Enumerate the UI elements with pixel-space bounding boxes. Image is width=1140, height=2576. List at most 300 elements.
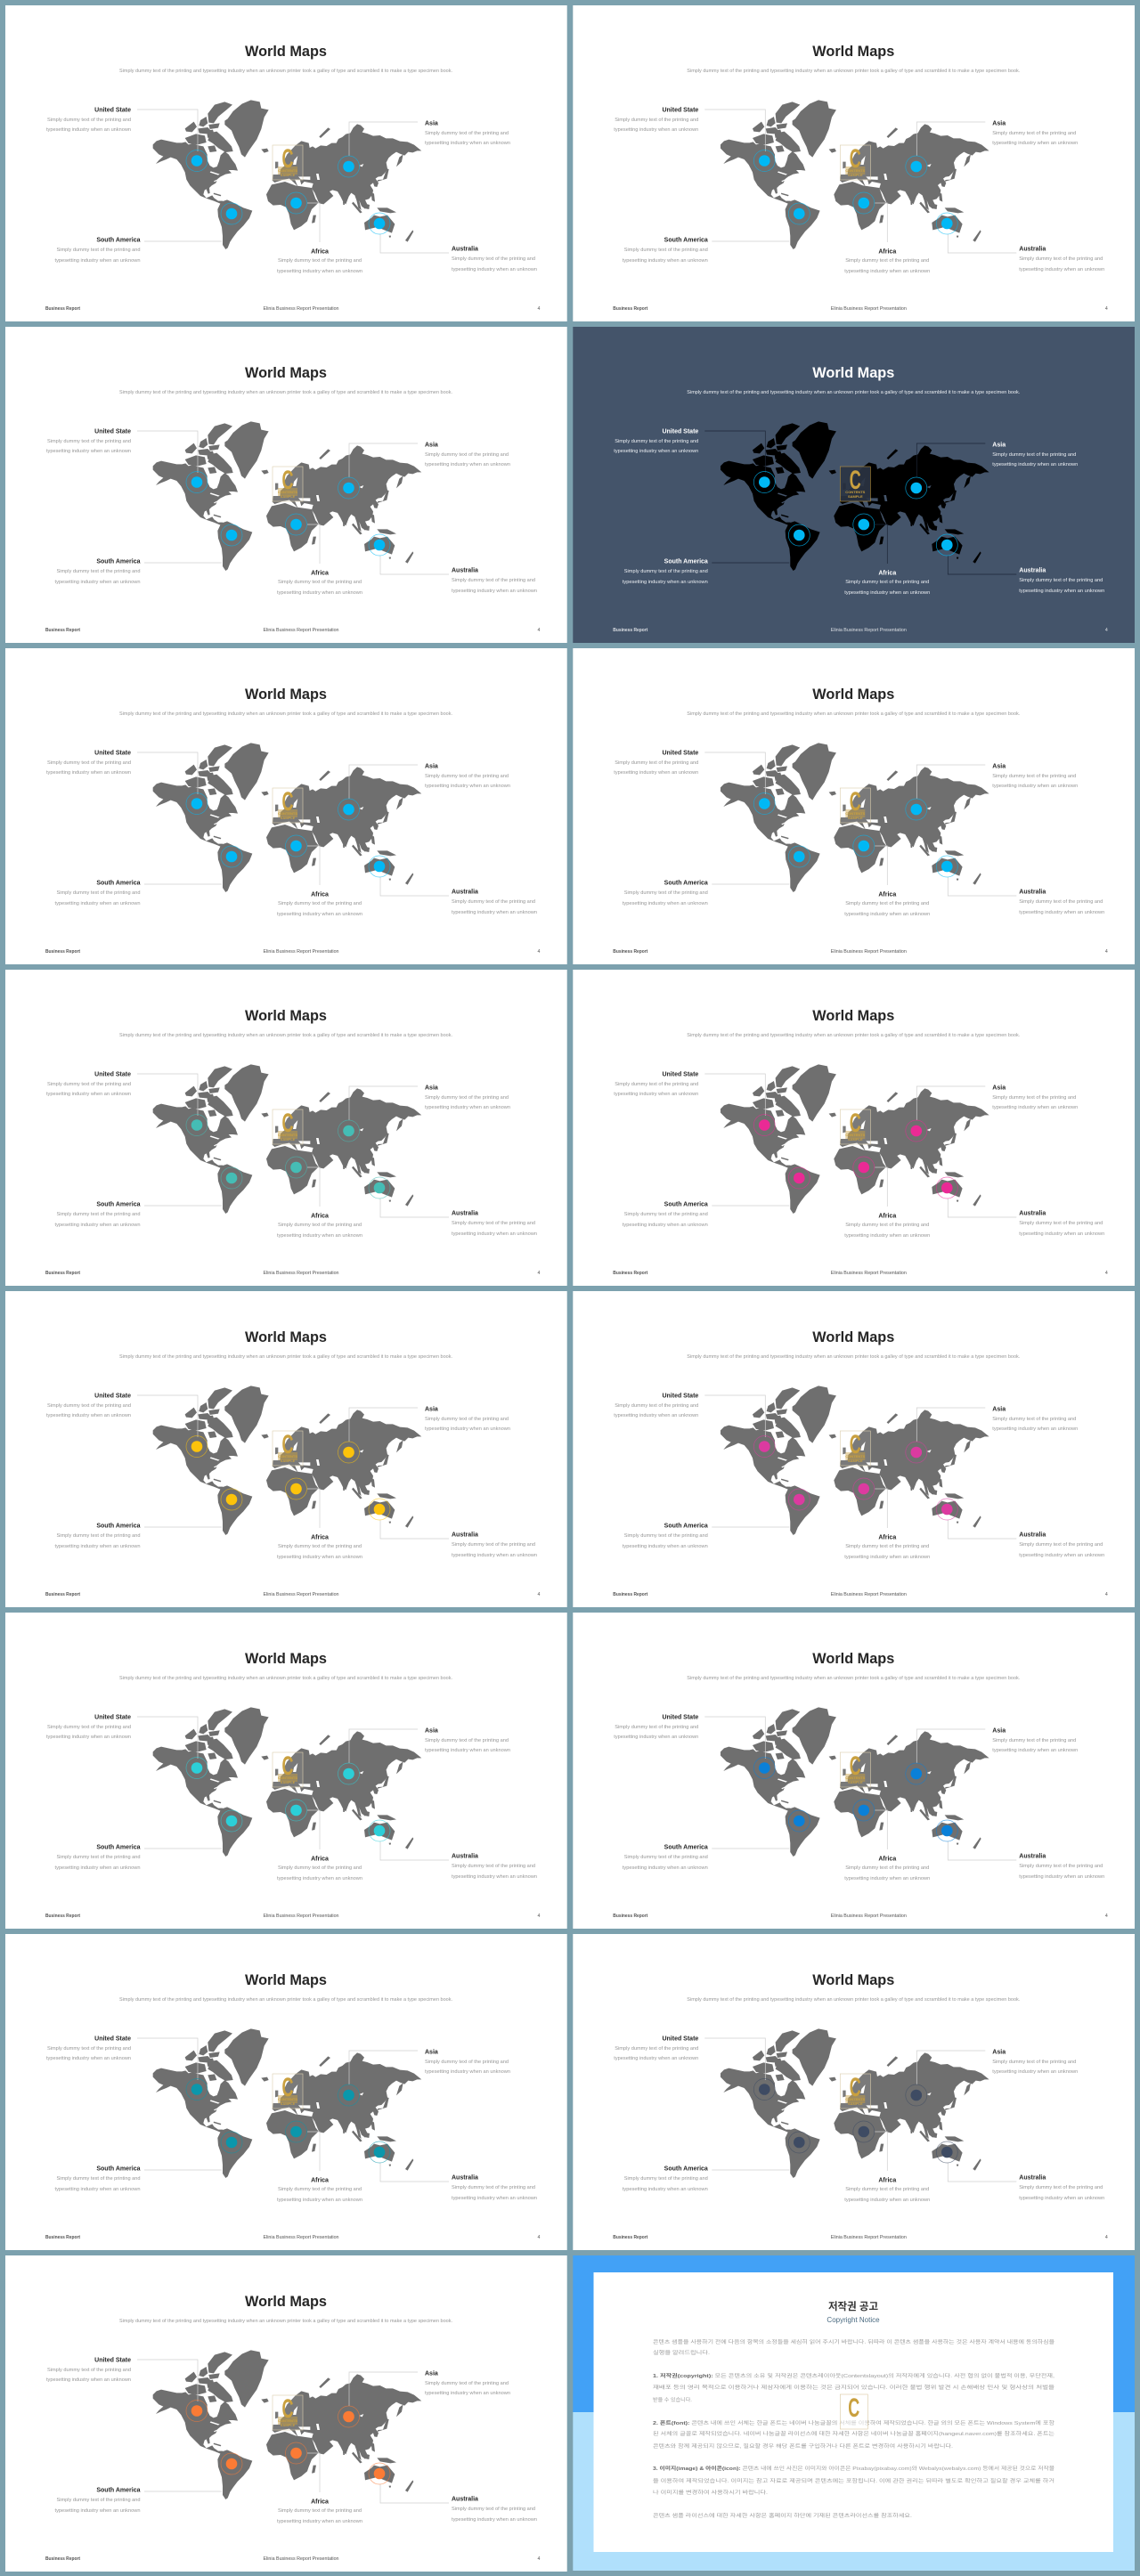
label: South America: typesetting industry when an unknown <box>55 580 141 585</box>
label: Asia: typesetting industry when an unknown <box>992 141 1078 146</box>
location markers <box>186 2401 390 2484</box>
footer <box>45 628 541 633</box>
label: Asia: typesetting industry when an unknown <box>425 1105 510 1110</box>
label: Asia <box>425 1407 510 1432</box>
label: South America: South America <box>96 1845 141 1850</box>
label: United State <box>614 429 698 454</box>
leader lines <box>704 110 1016 253</box>
footer <box>45 949 541 955</box>
location markers <box>753 792 957 877</box>
label: South America <box>623 880 708 906</box>
watermark: CONTENTS <box>845 811 866 816</box>
label: Asia: typesetting industry when an unknown <box>425 141 510 146</box>
watermark: CONTENTS <box>278 490 297 494</box>
watermark: SAMPLE <box>848 494 863 499</box>
label: United State: Simply dummy text of the printing and <box>47 2368 131 2373</box>
label: United State: Simply dummy text of the printing and <box>47 439 131 444</box>
label: South America <box>55 237 141 264</box>
label: United State: typesetting industry when an unknown <box>614 127 698 133</box>
notice body text: 된 서체의 글꼴로 제작되었습니다. 네이버 나눔글꼴 라이선스에 대한 자세한 사항은 네이버 나눔글꼴 홈페이지(hangeul.naver.com)를 참조하세요. 폰트는 <box>653 2430 1055 2437</box>
leader lines <box>137 431 449 574</box>
footer: 4 <box>538 628 541 633</box>
label: Africa: typesetting industry when an unknown <box>844 590 930 596</box>
watermark: SAMPLE <box>848 816 863 820</box>
label: South America: typesetting industry when an unknown <box>623 1544 708 1549</box>
label: Africa: typesetting industry when an unknown <box>844 2198 930 2203</box>
footer <box>613 2235 1108 2240</box>
label: United State <box>46 750 131 776</box>
label: South America: typesetting industry when an unknown <box>55 2508 141 2514</box>
footer: 4 <box>538 949 541 955</box>
footer: Elinia Business Report Presentation <box>264 1271 339 1276</box>
location markers <box>186 472 390 556</box>
world map <box>153 1707 421 1857</box>
label: Africa <box>277 1213 362 1239</box>
label: South America: typesetting industry when an unknown <box>55 2187 141 2192</box>
leader lines <box>137 110 449 253</box>
label: United State: United State <box>662 2036 698 2043</box>
location markers <box>753 150 957 234</box>
notice body text: 받을 수 있습니다. <box>653 2396 692 2403</box>
slide 9: world map, yellow markers <box>5 1291 567 1607</box>
slide 14: world map, navy markers <box>573 1934 1135 2250</box>
label: Africa: Africa <box>311 892 329 898</box>
watermark: SAMPLE <box>281 816 296 820</box>
label: Africa <box>277 1535 362 1560</box>
label: United State <box>614 2036 698 2061</box>
title: World Maps <box>812 1007 894 1024</box>
label: Asia <box>425 764 510 789</box>
watermark: CONTENTS <box>845 490 866 494</box>
label: Australia: Australia <box>452 246 478 253</box>
notice body text: 나 이미지를 변경하여 사용하시기 바랍니다. <box>653 2489 768 2496</box>
watermark: SAMPLE <box>281 1137 296 1142</box>
watermark: C <box>850 466 861 495</box>
label: South America: South America <box>96 2166 141 2173</box>
label: South America <box>623 237 708 264</box>
slide 1: world map, blue markers <box>5 5 567 321</box>
label: Australia <box>452 1854 537 1880</box>
footer <box>613 1592 1108 1597</box>
label: Africa: typesetting industry when an unknown <box>277 2198 362 2203</box>
footer: Business Report <box>45 628 80 633</box>
notice body text: 콘텐츠 샘플 라이선스에 대한 자세한 사항은 홈페이지 하단에 기재된 콘텐츠라이선스를 참조하세요. <box>653 2512 912 2519</box>
label: Africa: typesetting industry when an unknown <box>277 2519 362 2524</box>
label: Africa: Simply dummy text of the printing and <box>845 2187 929 2192</box>
footer: 4 <box>1105 628 1108 633</box>
world map <box>721 100 989 249</box>
label: Asia: Asia <box>425 764 438 769</box>
footer: Elinia Business Report Presentation <box>831 1271 907 1276</box>
watermark: C <box>281 2073 294 2102</box>
location markers <box>753 1435 957 1520</box>
label: South America: typesetting industry when an unknown <box>55 258 141 264</box>
label: Australia: Simply dummy text of the printing and <box>1019 2185 1103 2190</box>
label: Africa <box>277 570 362 596</box>
slide 10: world map, magenta markers <box>573 1291 1135 1607</box>
label: Australia <box>452 1532 537 1558</box>
footer <box>45 1914 541 1919</box>
subtitle: Simply dummy text of the printing and typesetting industry when an unknown printer took a galley of type and scrambled it to make a type specimen book. <box>687 1676 1020 1681</box>
slide 13: world map, dark teal markers <box>5 1934 567 2250</box>
label: United State: typesetting industry when an unknown <box>614 1735 698 1740</box>
leader lines <box>137 752 449 896</box>
label: Asia <box>992 1407 1078 1432</box>
label: South America <box>623 2166 708 2192</box>
label: Australia: Simply dummy text of the printing and <box>1019 1221 1103 1226</box>
location markers <box>753 1115 957 1199</box>
label: United State <box>46 429 131 454</box>
watermark: SAMPLE <box>848 173 863 177</box>
world map <box>153 1064 421 1214</box>
subheading: Copyright Notice <box>826 2316 880 2324</box>
location markers <box>753 1758 957 1841</box>
label: South America: South America <box>96 559 141 565</box>
label: Australia: typesetting industry when an unknown <box>452 267 537 272</box>
label: Africa <box>844 1535 930 1560</box>
label: United State: typesetting industry when an unknown <box>46 1413 131 1418</box>
footer: 4 <box>1105 1914 1108 1919</box>
label: Africa <box>277 892 362 917</box>
label: Australia: Australia <box>1019 2174 1046 2182</box>
watermark <box>273 1109 303 1144</box>
label: Asia: typesetting industry when an unknown <box>425 1426 510 1432</box>
label: Africa: Africa <box>311 249 329 255</box>
label: Africa <box>277 249 362 274</box>
title: World Maps <box>245 1007 327 1024</box>
watermark: C <box>281 1109 294 1138</box>
footer: 4 <box>1105 1592 1108 1597</box>
label: Africa: Simply dummy text of the printing and <box>278 1544 362 1549</box>
label: Africa <box>844 249 930 274</box>
label: South America: South America <box>664 1523 708 1530</box>
world map <box>721 743 989 892</box>
label: Australia: typesetting industry when an unknown <box>452 1231 537 1237</box>
title: World Maps <box>245 43 327 60</box>
label: Asia: typesetting industry when an unknown <box>992 462 1078 467</box>
watermark: C <box>850 1109 861 1138</box>
footer <box>45 1271 541 1276</box>
footer: Elinia Business Report Presentation <box>264 628 339 633</box>
label: Asia: Simply dummy text of the printing and <box>992 1738 1076 1743</box>
label: Australia: Australia <box>452 889 478 896</box>
watermark: CONTENTS <box>278 1133 297 1137</box>
label: Asia <box>992 121 1078 146</box>
watermark: C <box>848 2393 859 2423</box>
label: United State <box>614 1715 698 1740</box>
watermark: SAMPLE <box>848 1137 863 1142</box>
watermark: C <box>281 787 294 817</box>
label: United State: typesetting industry when an unknown <box>46 127 131 133</box>
watermark: CONTENTS <box>845 1776 866 1780</box>
label: Australia: Australia <box>1019 568 1046 573</box>
watermark <box>840 787 870 823</box>
footer: Elinia Business Report Presentation <box>831 2235 907 2240</box>
watermark <box>273 787 303 823</box>
leader lines <box>137 2360 449 2503</box>
label: Australia: typesetting industry when an unknown <box>452 910 537 915</box>
watermark: CONTENTS <box>278 811 297 816</box>
label: United State <box>46 107 131 133</box>
label: Australia: Simply dummy text of the printing and <box>452 2507 535 2512</box>
label: South America: Simply dummy text of the printing and <box>624 569 708 574</box>
label: South America: Simply dummy text of the printing and <box>624 1855 708 1860</box>
label: United State: United State <box>662 750 698 757</box>
footer <box>45 2235 541 2240</box>
label: Australia: typesetting industry when an unknown <box>452 1553 537 1558</box>
subtitle: Simply dummy text of the printing and typesetting industry when an unknown printer took a galley of type and scrambled it to make a type specimen book. <box>119 390 452 395</box>
label: Asia <box>992 1085 1078 1110</box>
watermark: CONTENTS <box>278 2418 297 2423</box>
label: Australia: Simply dummy text of the printing and <box>452 1864 535 1869</box>
location markers <box>186 1758 390 1841</box>
label: South America: South America <box>664 1202 708 1207</box>
label: Asia: Simply dummy text of the printing and <box>425 1417 509 1422</box>
label: South America: Simply dummy text of the printing and <box>57 2176 141 2182</box>
label: South America: Simply dummy text of the printing and <box>57 2498 141 2503</box>
label: Africa: typesetting industry when an unknown <box>844 912 930 917</box>
label: Africa: typesetting industry when an unknown <box>844 269 930 274</box>
location markers <box>186 150 390 234</box>
label: Australia: Simply dummy text of the printing and <box>452 578 535 583</box>
label: Africa: typesetting industry when an unknown <box>277 1233 362 1239</box>
title: World Maps <box>245 2293 327 2310</box>
location markers <box>186 2078 390 2163</box>
leader lines <box>137 1717 449 1860</box>
label: Australia: Australia <box>452 568 478 573</box>
footer: Business Report <box>45 2556 80 2562</box>
footer: Elinia Business Report Presentation <box>831 628 907 633</box>
label: Asia: typesetting industry when an unknown <box>425 2391 510 2396</box>
label: Australia: typesetting industry when an unknown <box>1019 267 1104 272</box>
label: Australia: Australia <box>452 1211 478 1216</box>
world map <box>721 1064 989 1214</box>
label: Africa <box>844 2178 930 2203</box>
watermark: CONTENTS <box>845 168 866 173</box>
label: South America: typesetting industry when an unknown <box>55 1223 141 1228</box>
slide 16: copyright notice <box>573 2255 1135 2571</box>
label: Australia: Australia <box>1019 1211 1046 1216</box>
label: South America: typesetting industry when an unknown <box>623 901 708 906</box>
label: United State: United State <box>94 1393 131 1400</box>
label: Asia: Asia <box>992 764 1006 769</box>
label: Asia <box>425 2370 510 2396</box>
watermark: C <box>281 1430 294 1459</box>
world map <box>153 2028 421 2178</box>
watermark: SAMPLE <box>848 2101 863 2106</box>
title: World Maps <box>812 686 894 703</box>
label: South America: Simply dummy text of the printing and <box>57 890 141 896</box>
leader lines <box>137 1074 449 1217</box>
label: Australia <box>452 1211 537 1237</box>
label: Australia: typesetting industry when an unknown <box>1019 2196 1104 2201</box>
label: South America: Simply dummy text of the printing and <box>57 248 141 253</box>
label: Asia: typesetting industry when an unknown <box>425 462 510 467</box>
label: Africa: typesetting industry when an unknown <box>277 269 362 274</box>
label: Asia: Simply dummy text of the printing and <box>992 774 1076 779</box>
footer: Elinia Business Report Presentation <box>264 2235 339 2240</box>
label: Africa <box>844 1856 930 1881</box>
footer <box>45 1592 541 1597</box>
footer: Elinia Business Report Presentation <box>264 949 339 955</box>
label: South America: South America <box>96 880 141 887</box>
label: Asia <box>425 2050 510 2075</box>
subtitle: Simply dummy text of the printing and typesetting industry when an unknown printer took a galley of type and scrambled it to make a type specimen book. <box>687 390 1020 395</box>
label: Australia <box>1019 1532 1104 1558</box>
watermark: C <box>850 144 861 174</box>
footer <box>613 1271 1108 1276</box>
label: Asia <box>425 442 510 467</box>
label: United State: Simply dummy text of the printing and <box>615 2046 698 2052</box>
label: Asia: typesetting industry when an unknown <box>992 1748 1078 1753</box>
label: United State: typesetting industry when an unknown <box>614 1413 698 1418</box>
watermark: C <box>281 1751 294 1781</box>
world map <box>721 1707 989 1857</box>
panel: notice card <box>593 2272 1113 2552</box>
label: Asia: Asia <box>992 1407 1006 1412</box>
label: Asia <box>425 1727 510 1753</box>
label: Africa: typesetting industry when an unknown <box>844 1876 930 1881</box>
notice body text: 3. 이미지(image) & 아이콘(icon): 콘텐츠 내에 쓰인 사진은 이미지와 아이콘은 Pixabay(pixabay.com)와 Webalys(webalys.com) 등에서 제공된 것으로 저작물 <box>653 2465 1055 2472</box>
label: United State: Simply dummy text of the printing and <box>47 2046 131 2052</box>
label: United State: typesetting industry when an unknown <box>614 770 698 776</box>
label: South America: South America <box>664 2166 708 2173</box>
label: Australia: typesetting industry when an unknown <box>1019 1231 1104 1237</box>
label: South America: Simply dummy text of the printing and <box>57 1533 141 1539</box>
footer: Elinia Business Report Presentation <box>831 1914 907 1919</box>
label: South America: typesetting industry when an unknown <box>55 1865 141 1871</box>
watermark: SAMPLE <box>848 1780 863 1784</box>
label: South America: typesetting industry when an unknown <box>623 580 708 585</box>
label: Africa: typesetting industry when an unknown <box>277 912 362 917</box>
title: World Maps <box>245 1329 327 1345</box>
leader lines <box>704 1074 1016 1217</box>
watermark: SAMPLE <box>281 1780 296 1784</box>
label: South America <box>55 1845 141 1871</box>
label: South America: typesetting industry when an unknown <box>55 901 141 906</box>
footer: Business Report <box>45 1914 80 1919</box>
label: United State: Simply dummy text of the printing and <box>615 1403 698 1409</box>
label: Africa <box>844 570 930 596</box>
label: Asia: Simply dummy text of the printing and <box>992 1095 1076 1101</box>
label: South America: South America <box>664 237 708 244</box>
label: Australia: Australia <box>1019 1854 1046 1859</box>
label: United State: Simply dummy text of the printing and <box>615 439 698 444</box>
label: Africa: Africa <box>878 2178 896 2183</box>
label: South America: Simply dummy text of the printing and <box>624 2176 708 2182</box>
notice body text: 2. 폰트(font): 콘텐츠 내에 쓰인 서체는 한글 폰트는 네이버 나눔글꼴의 서체를 이용하여 제작되었습니다. 한글 외의 모든 폰트는 Windows System에 포함 <box>653 2419 1055 2426</box>
watermark: C <box>850 1430 861 1459</box>
label: Australia: typesetting industry when an unknown <box>1019 1553 1104 1558</box>
label: Australia: Simply dummy text of the printing and <box>452 256 535 262</box>
label: United State: United State <box>662 1393 698 1400</box>
slide 2: world map, blue markers <box>573 5 1135 321</box>
label: Australia: typesetting industry when an unknown <box>1019 910 1104 915</box>
label: United State <box>46 2036 131 2061</box>
label: Asia: Asia <box>425 121 438 126</box>
label: United State: United State <box>94 429 131 435</box>
footer: Business Report <box>613 306 648 312</box>
label: Asia: Asia <box>992 1085 1006 1092</box>
label: Asia <box>425 1085 510 1110</box>
label: Africa: Africa <box>878 1535 896 1540</box>
label: South America: Simply dummy text of the printing and <box>624 1212 708 1217</box>
label: Asia <box>992 2050 1078 2075</box>
world map <box>153 421 421 571</box>
notice body text: 콘텐츠와 함께 제공되지 않으므로, 필요할 경우 해당 폰트를 구입하거나 다른 폰트로 변경하여 사용하시기 바랍니다. <box>653 2442 953 2450</box>
footer: Elinia Business Report Presentation <box>831 1592 907 1597</box>
label: Australia <box>1019 1854 1104 1880</box>
subtitle: Simply dummy text of the printing and typesetting industry when an unknown printer took a galley of type and scrambled it to make a type specimen book. <box>119 69 452 74</box>
label: South America: typesetting industry when an unknown <box>623 1223 708 1228</box>
label: Africa: Africa <box>878 570 896 577</box>
label: Australia: Simply dummy text of the printing and <box>452 1542 535 1548</box>
label: United State: United State <box>94 2036 131 2043</box>
label: Australia: typesetting industry when an unknown <box>1019 589 1104 594</box>
label: Asia: Asia <box>992 1727 1006 1735</box>
label: United State: United State <box>662 107 698 114</box>
label: Australia <box>1019 889 1104 915</box>
label: Asia: Simply dummy text of the printing and <box>425 774 509 779</box>
label: United State: Simply dummy text of the printing and <box>615 760 698 766</box>
label: South America: typesetting industry when an unknown <box>623 2187 708 2192</box>
footer: Elinia Business Report Presentation <box>264 306 339 312</box>
title: World Maps <box>245 1650 327 1667</box>
watermark: CONTENTS <box>845 1133 866 1137</box>
label: United State: Simply dummy text of the printing and <box>47 1403 131 1409</box>
label: Africa: Simply dummy text of the printing and <box>278 1223 362 1228</box>
label: Africa: typesetting industry when an unknown <box>844 1555 930 1560</box>
title: World Maps <box>812 1329 894 1345</box>
label: Australia: typesetting industry when an unknown <box>452 589 537 594</box>
label: United State: Simply dummy text of the printing and <box>615 118 698 123</box>
footer: Business Report <box>45 1271 80 1276</box>
footer: 4 <box>538 306 541 312</box>
watermark <box>840 144 870 180</box>
label: South America: South America <box>664 559 708 565</box>
label: Australia: Simply dummy text of the printing and <box>1019 1542 1103 1548</box>
label: Africa: Simply dummy text of the printing and <box>845 580 929 585</box>
watermark <box>273 1751 303 1787</box>
label: United State <box>46 1393 131 1418</box>
footer: Business Report <box>613 949 648 955</box>
label: United State <box>46 1072 131 1097</box>
subtitle: Simply dummy text of the printing and typesetting industry when an unknown printer took a galley of type and scrambled it to make a type specimen book. <box>119 1354 452 1360</box>
slide 5: world map, blue markers <box>5 648 567 964</box>
label: South America <box>55 1523 141 1549</box>
notice body text: 콘텐츠 샘플을 사용하기 전에 다음의 항목의 소정들을 세심히 읽어 주시기 바랍니다. 뒤따라 이 콘텐츠 샘플을 사용하는 것은 사용자 계약서 내용에 동의하심을 <box>653 2338 1055 2345</box>
footer: 4 <box>538 1592 541 1597</box>
footer: Business Report <box>45 306 80 312</box>
world map <box>721 1386 989 1535</box>
label: Australia <box>1019 1211 1104 1237</box>
label: Australia: Australia <box>452 1532 478 1539</box>
label: Asia: typesetting industry when an unknown <box>425 1748 510 1753</box>
label: Africa: Africa <box>311 2499 329 2506</box>
label: United State: Simply dummy text of the printing and <box>47 1082 131 1087</box>
label: United State <box>46 1715 131 1740</box>
label: South America: Simply dummy text of the printing and <box>624 1533 708 1539</box>
label: Africa: Simply dummy text of the printing and <box>845 901 929 906</box>
label: Asia: Simply dummy text of the printing and <box>425 2060 509 2065</box>
label: Australia: Australia <box>452 1854 478 1859</box>
title: World Maps <box>812 43 894 60</box>
label: South America: South America <box>96 2488 141 2493</box>
label: United State: United State <box>94 2358 131 2363</box>
label: Australia: Australia <box>452 2174 478 2182</box>
label: Africa: Africa <box>311 1213 329 1220</box>
watermark: SAMPLE <box>281 2423 296 2427</box>
